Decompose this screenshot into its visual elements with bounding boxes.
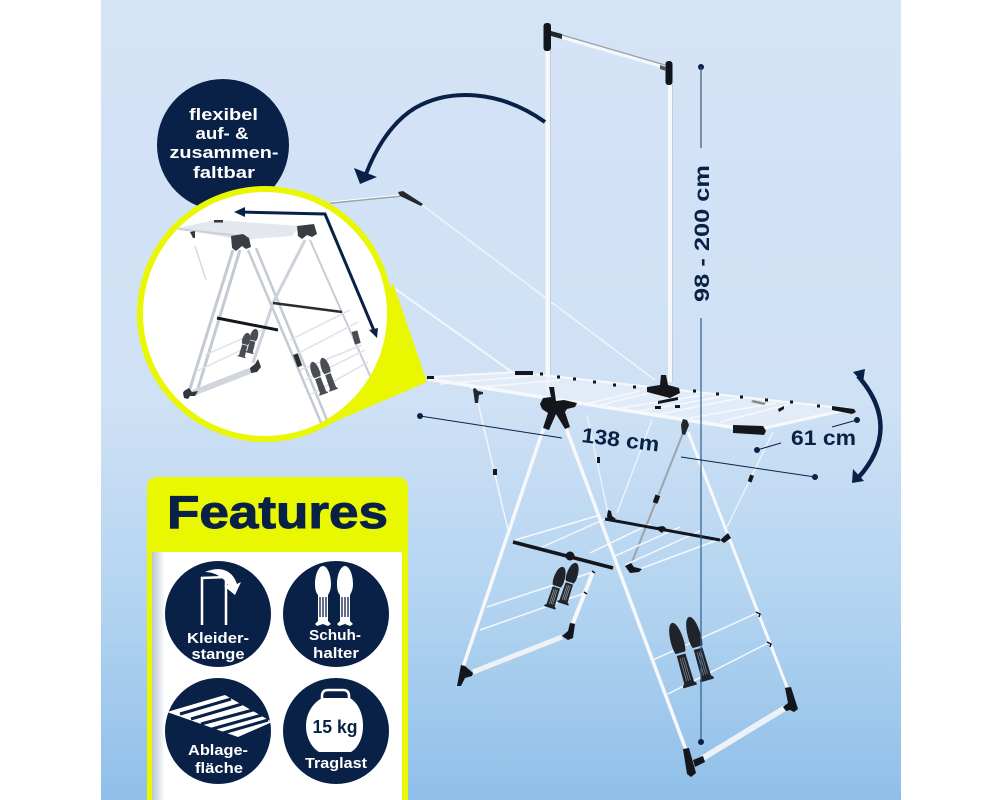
icon: Traglast 15 kg: 15 kg: [312, 717, 358, 737]
icon: Ablagefläche: fläche: [195, 761, 243, 777]
icon: Traglast 15 kg: [283, 678, 389, 784]
right shoe holders: [665, 615, 714, 688]
arrow: tilt: [852, 369, 880, 483]
inset circle: folded rack: [137, 186, 393, 442]
badge: foldable: zusammen-: [170, 143, 278, 162]
badge: foldable: [157, 79, 289, 211]
depth label: 61 cm: [791, 427, 856, 450]
rack: top shelf: [427, 371, 856, 435]
panel: features: [147, 477, 408, 800]
icon: Kleiderstange: stange: [192, 647, 244, 663]
dimension: height: [691, 64, 714, 745]
rack: legs and braces: [457, 388, 798, 777]
icon: Ablagefläche: [165, 678, 272, 784]
arrow: fold: [354, 95, 545, 184]
badge: foldable: flexibel: [189, 105, 258, 124]
dimension: width 138 cm: [417, 413, 818, 480]
extended folding arm lines: [330, 191, 655, 380]
icon: Kleiderstange: Kleider-: [187, 631, 249, 647]
height label: 98 - 200 cm: [691, 165, 714, 302]
rack: lower shelf: [513, 510, 731, 573]
badge: foldable: faltbar: [193, 163, 255, 182]
features heading: Features: [167, 486, 388, 538]
background panel: [101, 0, 901, 800]
rack: hanging rail: [544, 23, 672, 392]
left shoe holders: [544, 561, 582, 610]
icon: Ablagefläche: Ablage-: [188, 743, 248, 759]
icon: Kleiderstange: [165, 561, 271, 667]
width label: 138 cm: [580, 424, 661, 456]
inset arrow: [234, 207, 378, 338]
rack: central hub: [540, 387, 577, 430]
callout pointer: [320, 283, 427, 428]
icon: Schuhhalter: Schuh-: [309, 628, 361, 644]
rack: wires: [480, 571, 771, 694]
icon: Schuhhalter: halter: [313, 646, 359, 662]
badge: foldable: auf- &: [196, 124, 248, 143]
icon: Schuhhalter: [283, 561, 389, 667]
dimension: depth 61 cm: [754, 417, 860, 453]
icon: Traglast 15 kg: Traglast: [305, 756, 367, 772]
